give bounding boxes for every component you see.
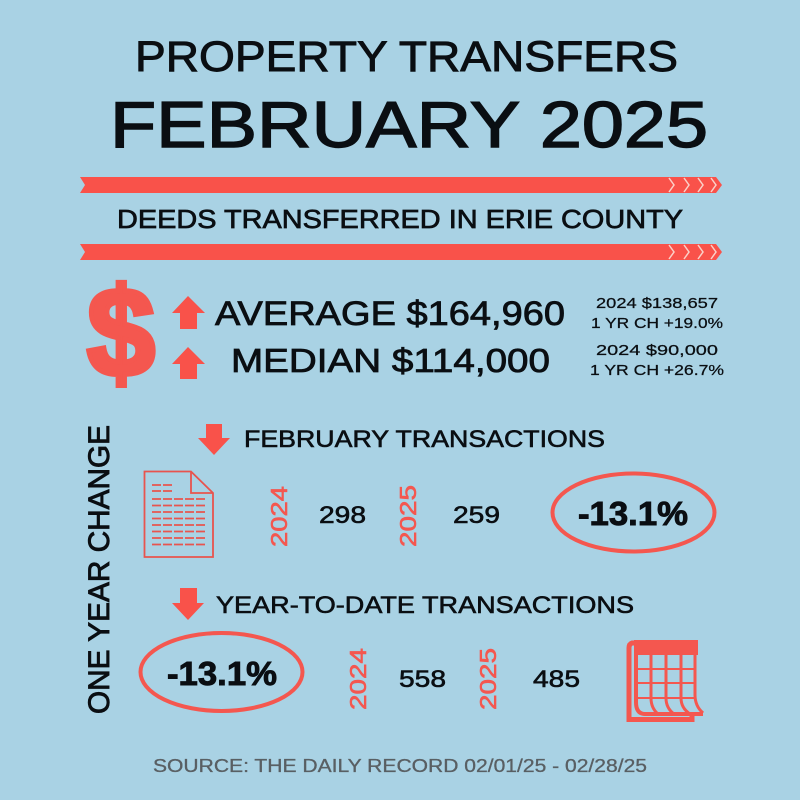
average comparison xyxy=(591,295,723,332)
title: PROPERTY TRANSFERS xyxy=(135,33,678,81)
icon: calendar xyxy=(629,640,703,720)
february 2024 value xyxy=(266,486,366,547)
average comparison: 1 YR CH +19.0% xyxy=(591,315,723,332)
icon: document xyxy=(144,472,213,557)
year to date 2024 value xyxy=(345,648,446,710)
year to date 2024 value: 2024 xyxy=(345,648,371,710)
median comparison xyxy=(590,342,724,379)
callout: february change xyxy=(552,474,714,552)
average price: AVERAGE $164,960 xyxy=(215,295,565,333)
callout: year to date change xyxy=(140,633,302,711)
subtitle: DEEDS TRANSFERRED IN ERIE COUNTY xyxy=(117,204,683,234)
heading: year-to-date transactions: YEAR-TO-DATE TRANSACTIONS xyxy=(216,592,634,619)
average comparison: 2024 $138,657 xyxy=(596,295,718,312)
february 2024 value: 2024 xyxy=(266,486,292,547)
source note: SOURCE: THE DAILY RECORD 02/01/25 - 02/28/25 xyxy=(153,756,647,776)
callout: year to date change: -13.1% xyxy=(167,655,277,692)
year to date 2025 value xyxy=(475,648,580,710)
vertical label: one year change: ONE YEAR CHANGE xyxy=(83,425,116,714)
february 2025 value: 2025 xyxy=(395,485,421,547)
callout: february change: -13.1% xyxy=(578,495,688,532)
median comparison: 1 YR CH +26.7% xyxy=(590,362,724,379)
title: FEBRUARY 2025 xyxy=(110,88,708,161)
median comparison: 2024 $90,000 xyxy=(596,342,718,359)
year to date 2025 value: 2025 xyxy=(475,648,501,710)
median price: MEDIAN $114,000 xyxy=(231,342,550,379)
heading: february transactions: FEBRUARY TRANSACTIONS xyxy=(244,426,605,453)
year to date 2024 value: 558 xyxy=(399,666,446,693)
icon: up arrow average xyxy=(172,296,205,329)
icon: down arrow year to date xyxy=(172,588,204,620)
title xyxy=(110,33,708,161)
february 2025 value xyxy=(395,485,500,547)
icon: up arrow median xyxy=(172,347,205,379)
february 2024 value: 298 xyxy=(319,502,366,529)
icon: down arrow february xyxy=(198,424,230,455)
top ribbon arrow xyxy=(80,177,722,193)
icon: dollar sign: $ xyxy=(87,262,155,403)
february 2025 value: 259 xyxy=(453,502,500,529)
bottom ribbon arrow xyxy=(80,244,722,260)
year to date 2025 value: 485 xyxy=(533,666,580,693)
